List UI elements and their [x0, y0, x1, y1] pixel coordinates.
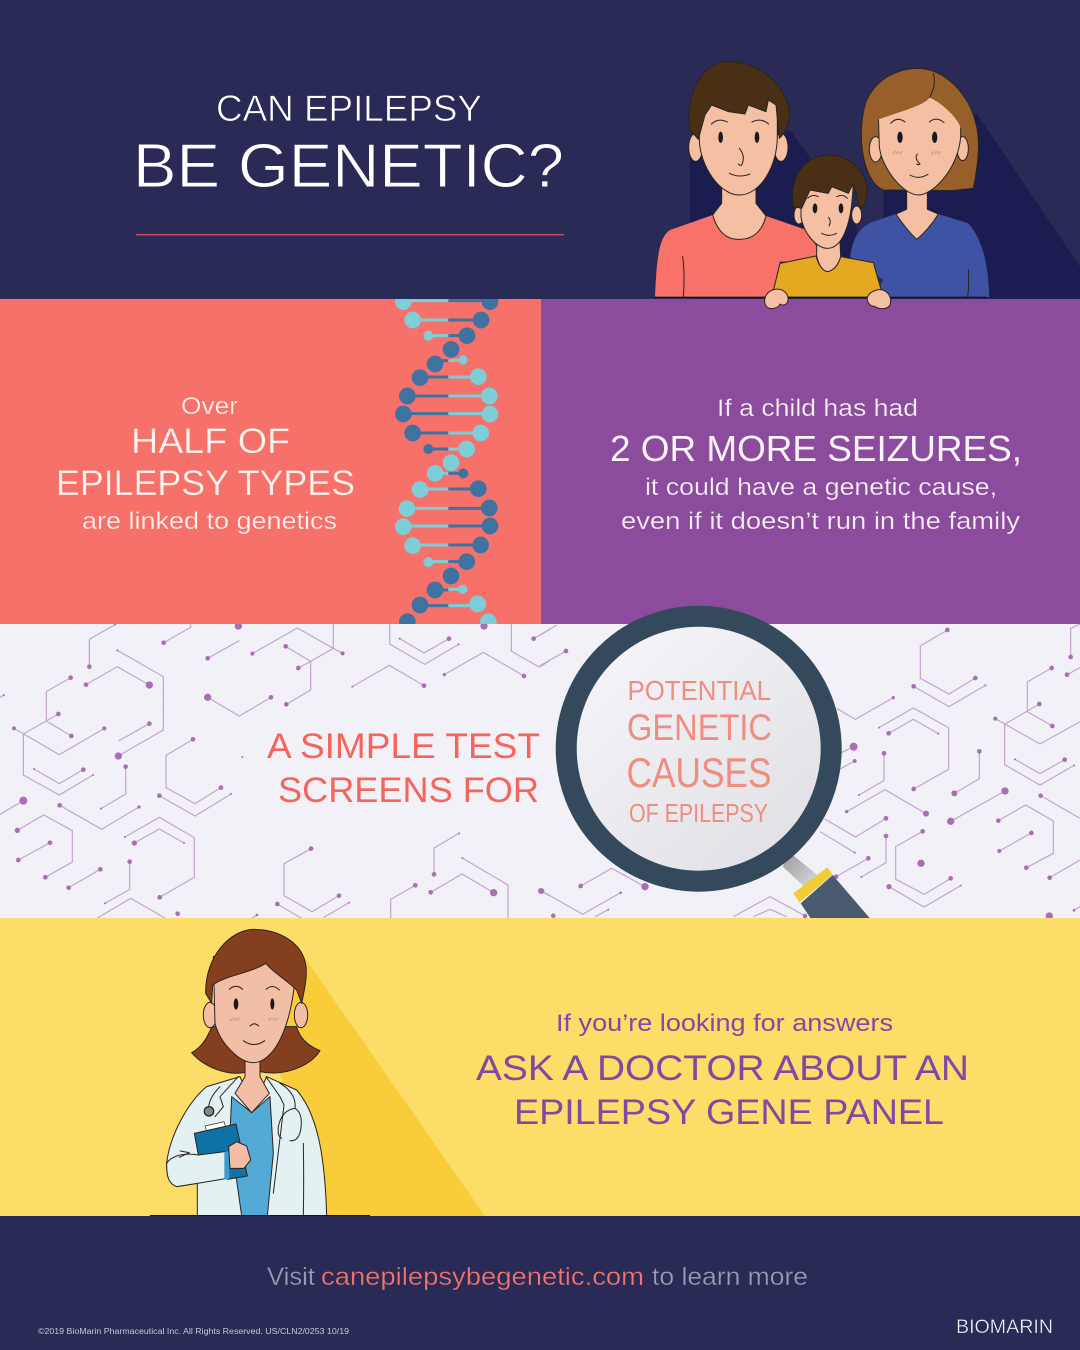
decorative circuit network — [0, 622, 1080, 920]
figure: mother — [850, 68, 989, 297]
text: seizures message: 2 OR MORE SEIZURES, — [610, 428, 1022, 469]
lens text: potential genetic causes of epilepsy: CAUSES — [626, 749, 772, 796]
logo: BioMarin: BIOMARIN — [956, 1317, 1053, 1338]
illustration: doctor — [167, 929, 485, 1216]
call to action — [267, 1263, 808, 1291]
text: half of epilepsy types — [56, 393, 355, 535]
text: seizures message: it could have a genetic cause, — [645, 474, 997, 501]
text: half of epilepsy types: are linked to genetics — [82, 508, 337, 535]
lens text: potential genetic causes of epilepsy: POTENTIAL — [628, 675, 771, 706]
text: ask a doctor: If you’re looking for answers — [556, 1010, 893, 1037]
copyright: ©2019 BioMarin Pharmaceutical Inc. All Rights Reserved. US/CLN2/0253 10/19 — [38, 1327, 350, 1336]
text: ask a doctor: EPILEPSY GENE PANEL — [514, 1093, 944, 1132]
text: seizures message — [610, 395, 1022, 535]
child hands — [765, 289, 891, 309]
magnifier handle — [783, 853, 870, 918]
icon: DNA helix — [395, 293, 498, 630]
doctor facial features — [229, 986, 279, 1044]
clipboard and hand — [167, 1122, 251, 1187]
panel: half of epilepsy types — [0, 293, 541, 630]
call to action: canepilepsybegenetic.com — [321, 1263, 644, 1291]
ears and face — [203, 957, 308, 1063]
heading: a simple test screens for: A SIMPLE TEST — [267, 727, 540, 766]
text: half of epilepsy types: HALF OF — [131, 422, 290, 461]
stethoscope — [204, 1083, 301, 1141]
icon: magnifying glass — [566, 616, 870, 918]
lens text: potential genetic causes of epilepsy — [626, 675, 772, 828]
text: ask a doctor: ASK A DOCTOR ABOUT AN — [476, 1049, 969, 1088]
panel: two or more seizures — [541, 299, 1080, 624]
panel: footer — [0, 1216, 1080, 1350]
illustration: family — [654, 62, 1080, 309]
scrub top — [230, 1097, 273, 1216]
figure: father — [655, 62, 817, 297]
long shadow behind family — [690, 113, 1080, 298]
heading: a simple test screens for — [267, 727, 540, 810]
text: half of epilepsy types: Over — [181, 393, 238, 420]
lens text: potential genetic causes of epilepsy: GENETIC — [627, 707, 772, 748]
doctor hair front — [206, 929, 306, 1003]
title: BE GENETIC? — [133, 132, 564, 201]
doctor hair back — [192, 1027, 320, 1073]
text: seizures message: If a child has had — [717, 395, 918, 422]
neck — [235, 1060, 269, 1113]
panel: header — [0, 0, 1080, 299]
lens text: potential genetic causes of epilepsy: OF EPILEPSY — [629, 798, 768, 828]
call to action: to learn more — [652, 1263, 808, 1291]
text: seizures message: even if it doesn’t run in the family — [621, 508, 1020, 535]
text: ask a doctor — [476, 1010, 969, 1132]
lab coat — [167, 1077, 327, 1216]
call to action: Visit — [267, 1263, 315, 1291]
panel: ask a doctor — [0, 918, 1080, 1217]
figure: child — [772, 155, 883, 297]
text: half of epilepsy types: EPILEPSY TYPES — [56, 464, 355, 503]
panel: simple test — [0, 622, 1080, 920]
title — [133, 88, 564, 201]
heading: a simple test screens for: SCREENS FOR — [278, 771, 539, 810]
title: CAN EPILEPSY — [216, 88, 482, 129]
